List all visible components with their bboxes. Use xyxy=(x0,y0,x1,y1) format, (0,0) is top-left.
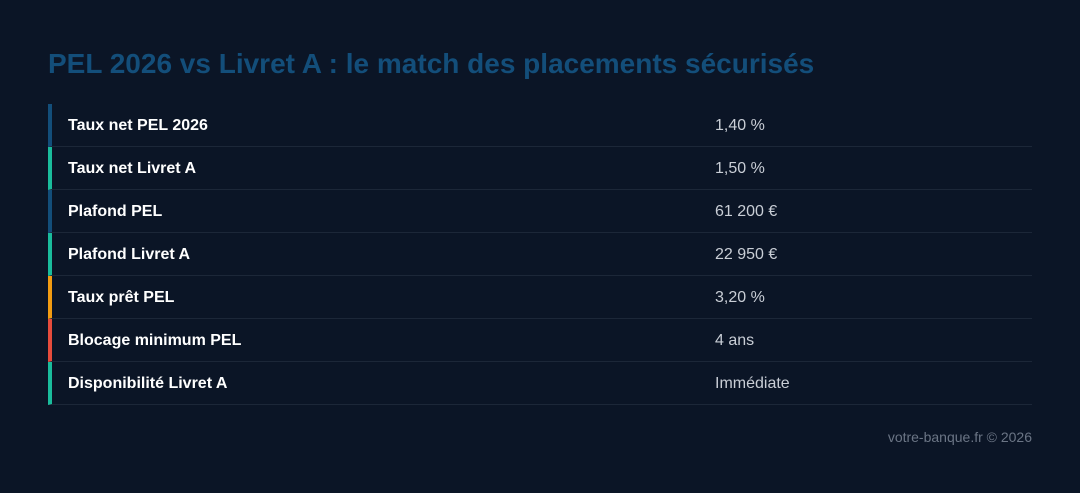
row: blocage: 4 ans xyxy=(715,332,754,349)
row: taux net Livret A: 1,50 % xyxy=(715,160,765,177)
row: blocage xyxy=(48,319,1032,362)
row: taux net Livret A xyxy=(48,147,1032,190)
row: plafond PEL: 61 200 € xyxy=(715,203,777,220)
row: taux net PEL xyxy=(48,104,1032,147)
row: taux net PEL: 1,40 % xyxy=(715,117,765,134)
row: disponibilité xyxy=(48,362,1032,405)
title: PEL 2026 vs Livret A : le match des placements sécurisés xyxy=(48,48,814,79)
row: taux net Livret A: Taux net Livret A xyxy=(68,160,196,177)
row: disponibilité: Immédiate xyxy=(715,375,790,392)
row: plafond Livret A: 22 950 € xyxy=(715,246,777,263)
row: plafond Livret A xyxy=(48,233,1032,276)
row: taux net PEL: Taux net PEL 2026 xyxy=(68,117,208,134)
row: plafond PEL: Plafond PEL xyxy=(68,203,162,220)
footer credit: votre-banque.fr © 2026 xyxy=(888,429,1032,445)
row: taux prêt PEL: 3,20 % xyxy=(715,289,765,306)
row: plafond Livret A: Plafond Livret A xyxy=(68,246,190,263)
row: blocage: Blocage minimum PEL xyxy=(68,332,241,349)
row: disponibilité: Disponibilité Livret A xyxy=(68,375,227,392)
row: taux prêt PEL: Taux prêt PEL xyxy=(68,289,174,306)
row: taux prêt PEL xyxy=(48,276,1032,319)
row: plafond PEL xyxy=(48,190,1032,233)
comparison table xyxy=(48,104,1032,405)
